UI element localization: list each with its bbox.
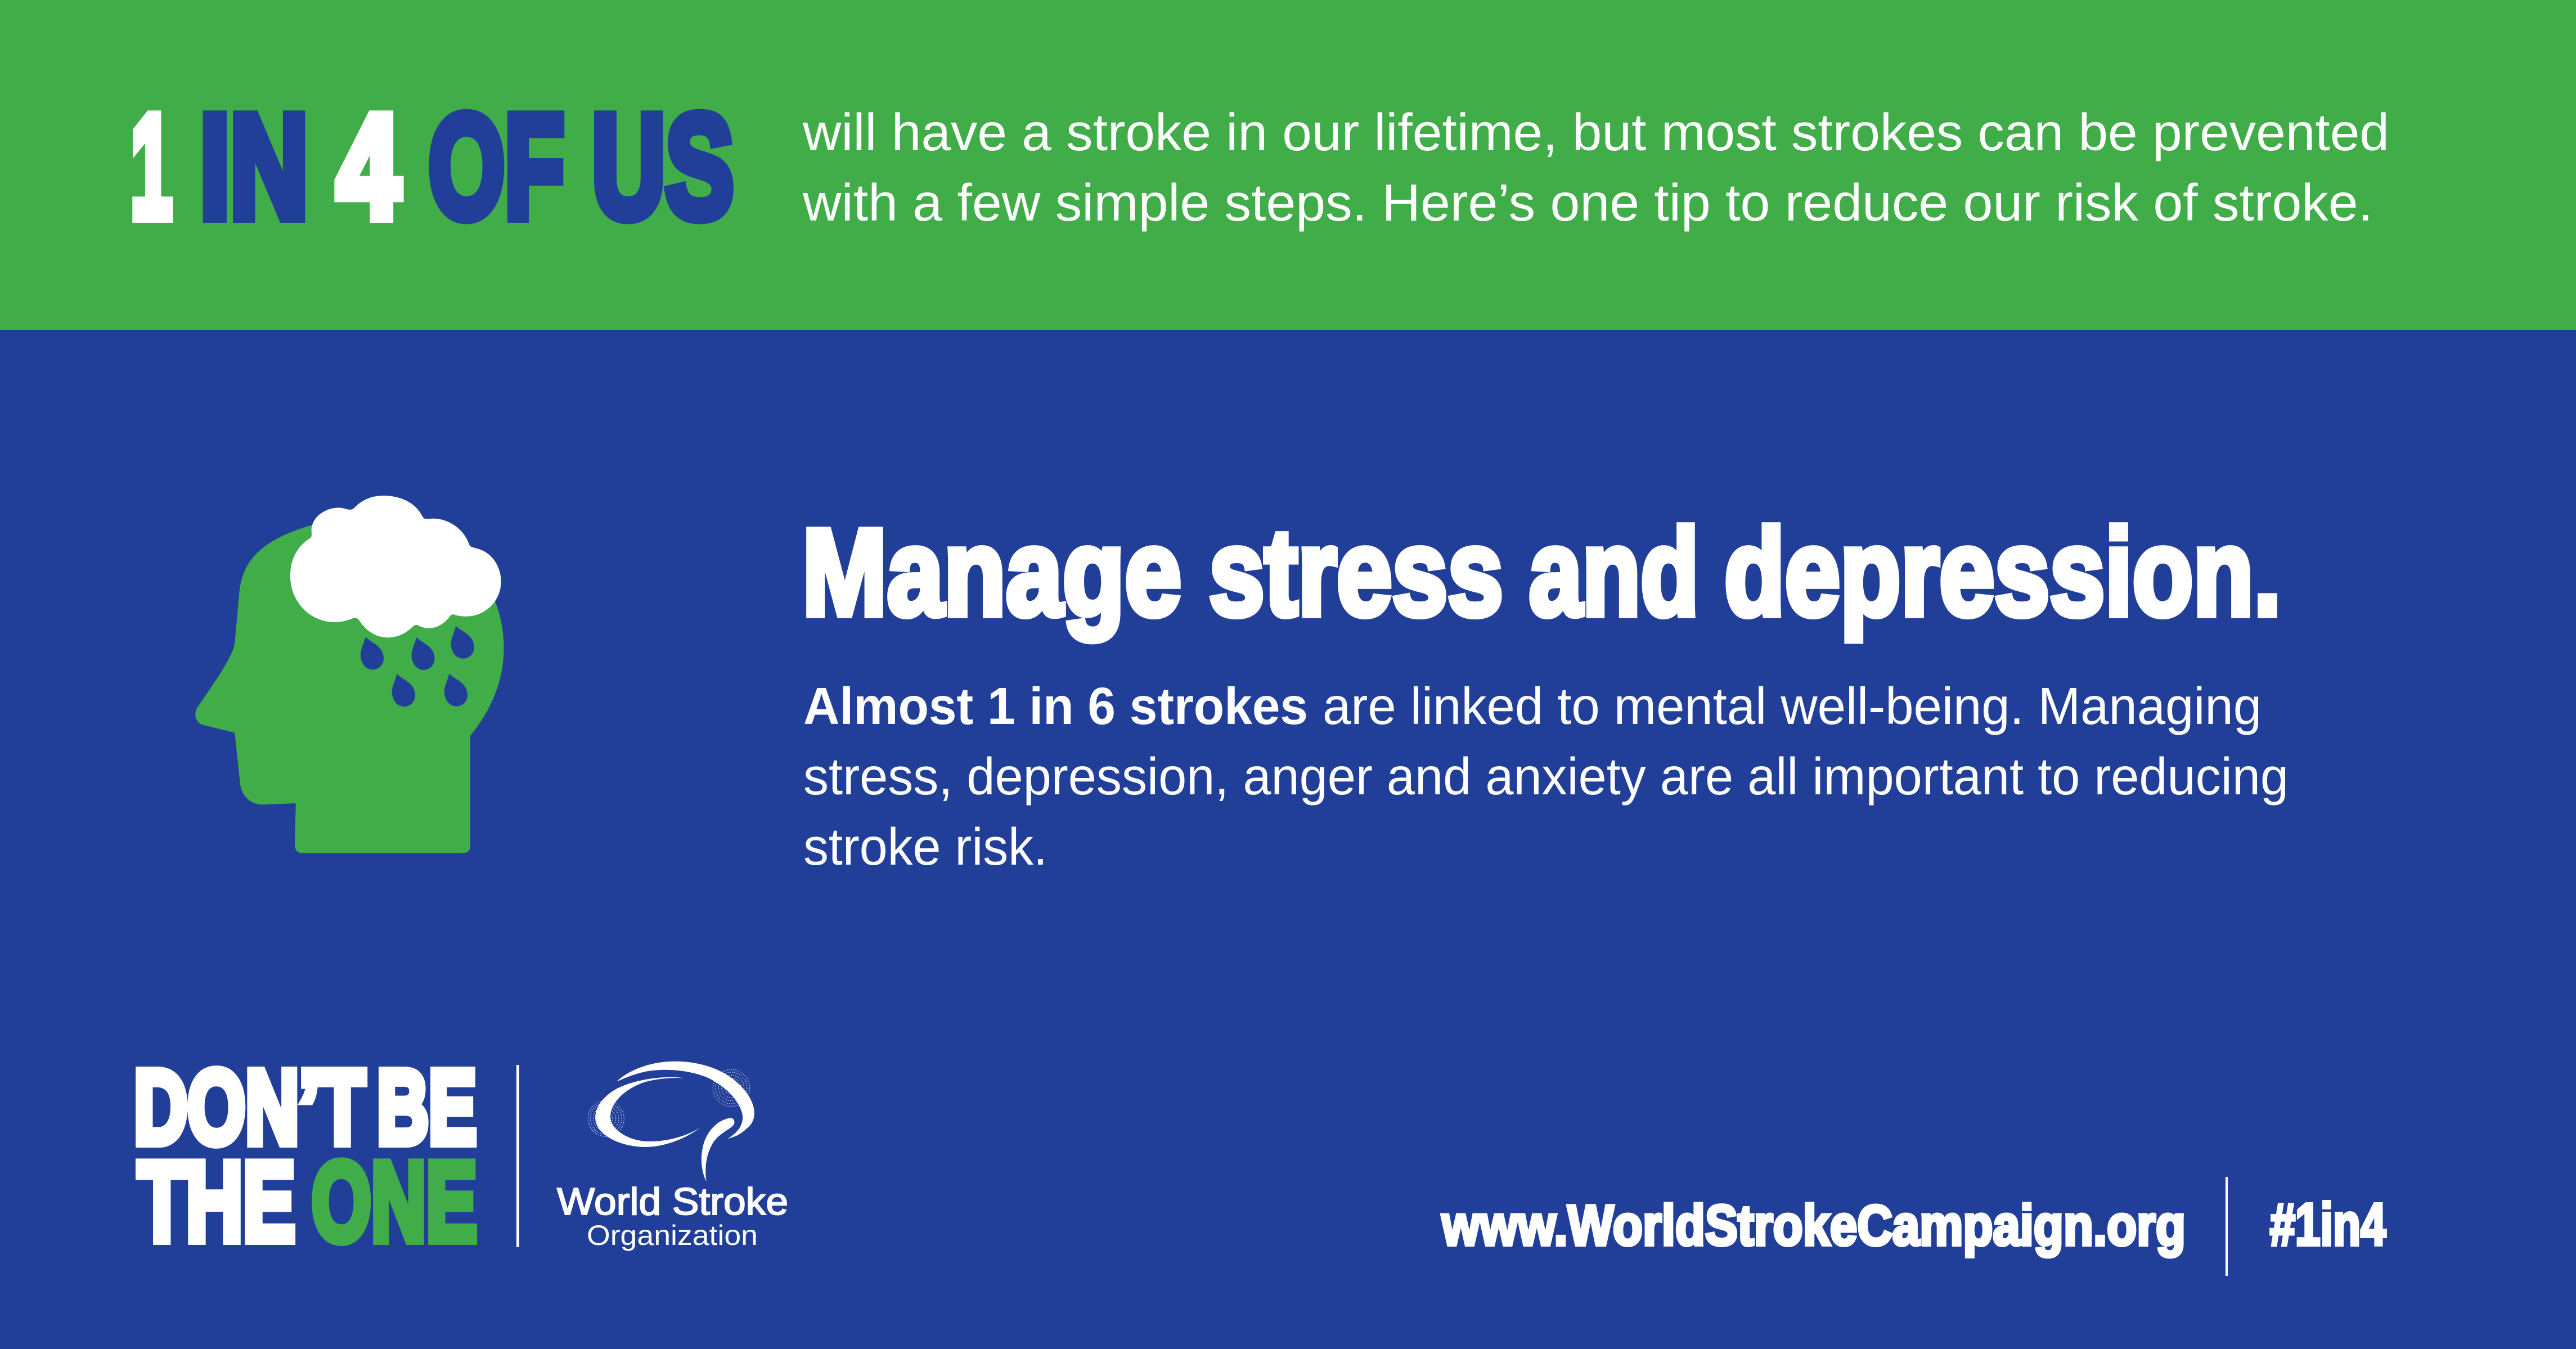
logo line: don't be: DON’T [134,1049,365,1166]
title: manage stress and depression: stress [1209,504,1503,641]
logo line: don't be: BE [377,1049,476,1166]
logo line: the one: THE [138,1139,295,1265]
title: manage stress and depression: and [1529,504,1699,641]
intro text: with a few simple steps. Here’s one tip to reduce our risk of stroke. [802,173,2373,232]
intro text [802,103,2389,232]
title: manage stress and depression: depression. [1724,504,2281,641]
headline: 1 in 4 of us: OF [429,85,564,249]
icon part: head silhouette [195,524,504,853]
logo: don't be the one [134,1049,477,1265]
logo text: world stroke: World Stroke [557,1180,788,1223]
divider before hashtag [2226,1177,2228,1276]
logo mark: brain swoosh [588,1062,754,1181]
body text: stress, depression, anger and anxiety are all important to reducing [803,747,2289,806]
body text: Almost 1 in 6 strokes [803,677,1308,735]
title: manage stress and depression: Manage [802,504,1181,641]
logo line: the one: ONE [312,1139,477,1265]
intro text: will have a stroke in our lifetime, but most strokes can be prevented [802,103,2389,161]
hashtag: #1in4 [2270,1191,2386,1258]
headline: 1 in 4 of us: 4 [337,85,401,249]
logo text: organization: Organization [587,1220,758,1251]
icon: head with rain cloud [195,496,504,853]
logo: world stroke organization [557,1062,788,1251]
icon part: rain drops [361,627,474,707]
divider between logos [516,1065,519,1247]
headline: 1 in 4 of us: IN [200,85,308,249]
body text: stroke risk. [803,817,1048,876]
body text [803,677,2289,876]
headline: 1 in 4 of us: US [592,85,734,249]
headline: 1 in 4 of us: 1 [131,85,172,249]
website url: www.WorldStrokeCampaign.org [1441,1194,2186,1257]
icon part: cloud [290,496,501,637]
body text: are linked to mental well-being. Managing [1323,677,2262,735]
panel: green header band [0,0,2576,330]
